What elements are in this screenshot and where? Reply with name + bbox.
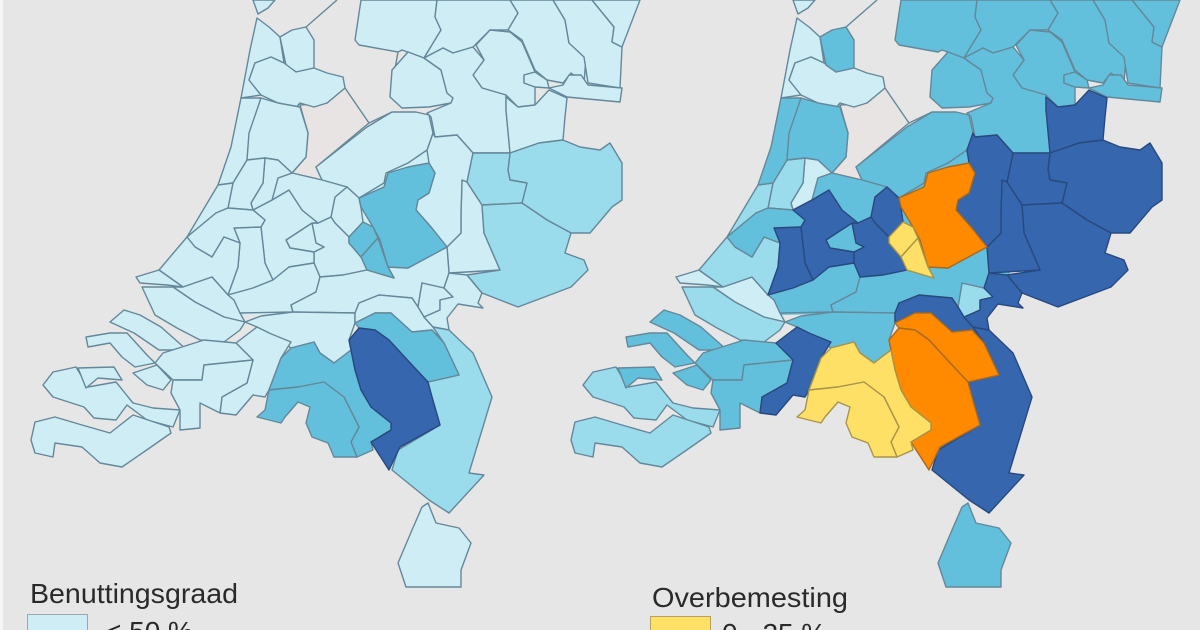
legend title: Benuttingsgraad (30, 578, 238, 609)
regions: yellow (797, 222, 934, 457)
legend title: Overbemesting (652, 582, 848, 613)
regions: very light (676, 0, 885, 322)
regions: highest class (349, 328, 440, 470)
regions: dark blue (760, 90, 1162, 513)
regions: medium blue (618, 0, 1180, 587)
regions: under 50 percent (31, 0, 640, 587)
regions: second class (392, 140, 622, 513)
legend swatch (28, 614, 88, 630)
regions: third class (257, 163, 459, 457)
land backing (180, 135, 470, 320)
legend: Benuttingsgraad (28, 578, 238, 630)
land backing (720, 135, 1010, 320)
lake and coast outlines (832, 0, 932, 180)
lake and coast outlines (292, 0, 398, 180)
map: Benuttingsgraad (31, 0, 640, 587)
regions: light blue (571, 158, 993, 467)
legend swatch (650, 616, 710, 630)
legend: Overbemesting (650, 582, 848, 630)
regions: orange (889, 163, 999, 470)
left margin strip (0, 0, 3, 630)
map: Overbemesting (571, 0, 1180, 587)
